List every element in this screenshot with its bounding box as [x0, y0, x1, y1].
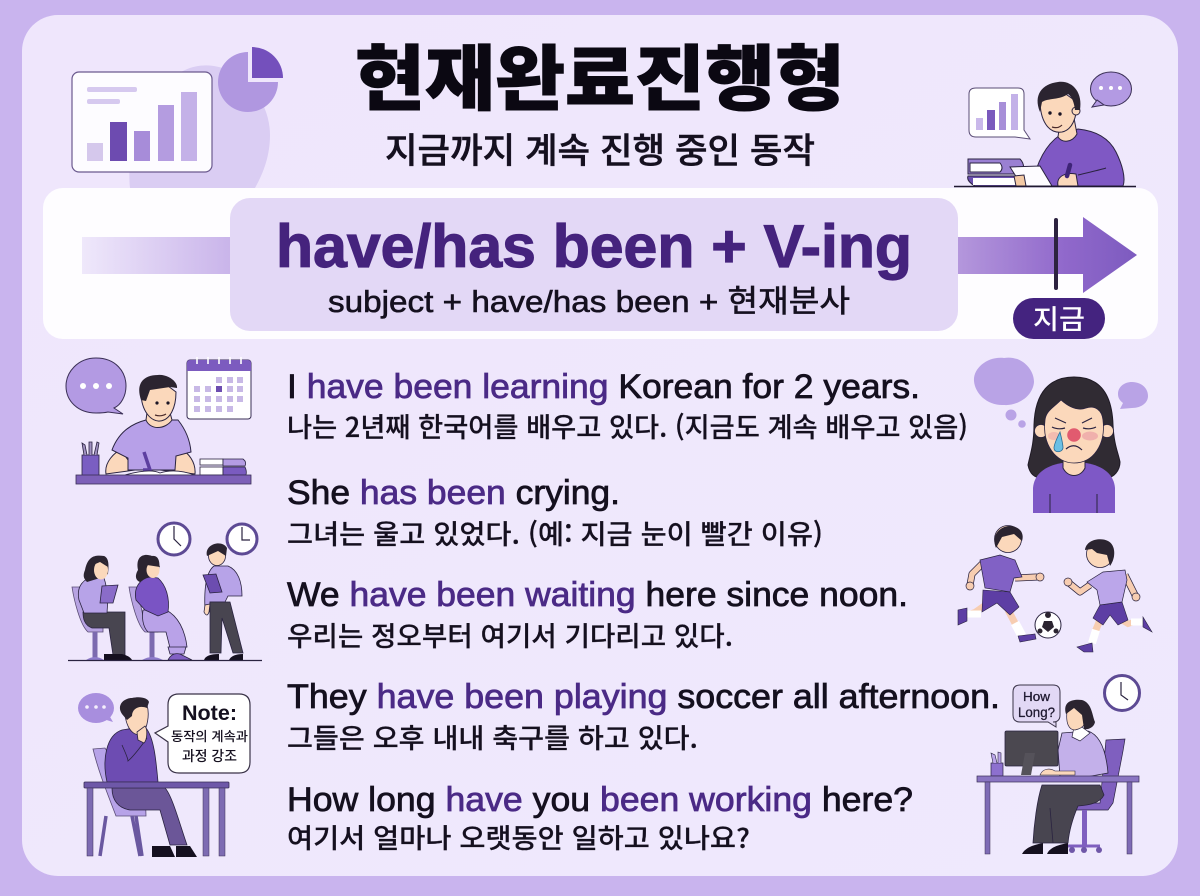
subtitle: 지금까지 계속 진행 중인 동작: [385, 123, 815, 174]
example 5: How long have you been working here?: [287, 781, 913, 819]
example 2: 그녀는 울고 있었다. (예: 지금 눈이 빨간 이유): [287, 513, 823, 552]
illustration: people waiting with clocks: [68, 523, 262, 660]
illustration: man studying with calendar: [66, 357, 251, 484]
formula explanation: subject + have/has been + 현재분사: [328, 276, 850, 321]
example 3: [287, 576, 908, 654]
how long bubble: How: [1023, 689, 1051, 704]
note bubble: [155, 694, 250, 773]
example 4: [287, 678, 1000, 756]
now badge: 지금: [1033, 298, 1085, 337]
timeline arrow past: [82, 237, 232, 274]
example 2: [287, 474, 823, 552]
formula: have/has been + V-ing: [276, 213, 912, 280]
now badge: [1013, 298, 1105, 339]
example 2: She has been crying.: [287, 474, 620, 512]
icon: chart dashboard: [72, 47, 283, 188]
example 4: They have been playing soccer all afternoon.: [287, 678, 1000, 716]
note bubble: 동작의 계속과: [171, 726, 248, 745]
panel: formula band: [43, 188, 1158, 339]
example 3: 우리는 정오부터 여기서 기다리고 있다.: [287, 615, 733, 654]
illustration: man thinking with note: [78, 693, 250, 857]
title: 현재완료진행형: [355, 23, 845, 125]
note bubble: 과정 강조: [182, 746, 237, 766]
note bubble: Note:: [182, 702, 237, 725]
example 1: [287, 368, 968, 445]
example 4: 그들은 오후 내내 축구를 하고 있다.: [287, 717, 698, 756]
illustration: woman working at computer: [977, 676, 1140, 854]
example 1: 나는 2년째 한국어를 배우고 있다. (지금도 계속 배우고 있음): [287, 406, 968, 445]
illustration: man writing at desk: [954, 72, 1136, 186]
example 3: We have been waiting here since noon.: [287, 576, 908, 614]
formula box: [230, 198, 958, 331]
now marker: [1054, 218, 1058, 290]
example 1: I have been learning Korean for 2 years.: [287, 368, 920, 406]
illustration: boys playing soccer: [958, 526, 1152, 652]
how long bubble: Long?: [1018, 704, 1055, 720]
example 5: 여기서 얼마나 오랫동안 일하고 있나요?: [287, 817, 750, 856]
illustration: crying girl: [974, 358, 1148, 513]
example 5: [287, 781, 913, 856]
how long bubble: [1013, 685, 1060, 727]
timeline arrow future: [958, 217, 1137, 293]
